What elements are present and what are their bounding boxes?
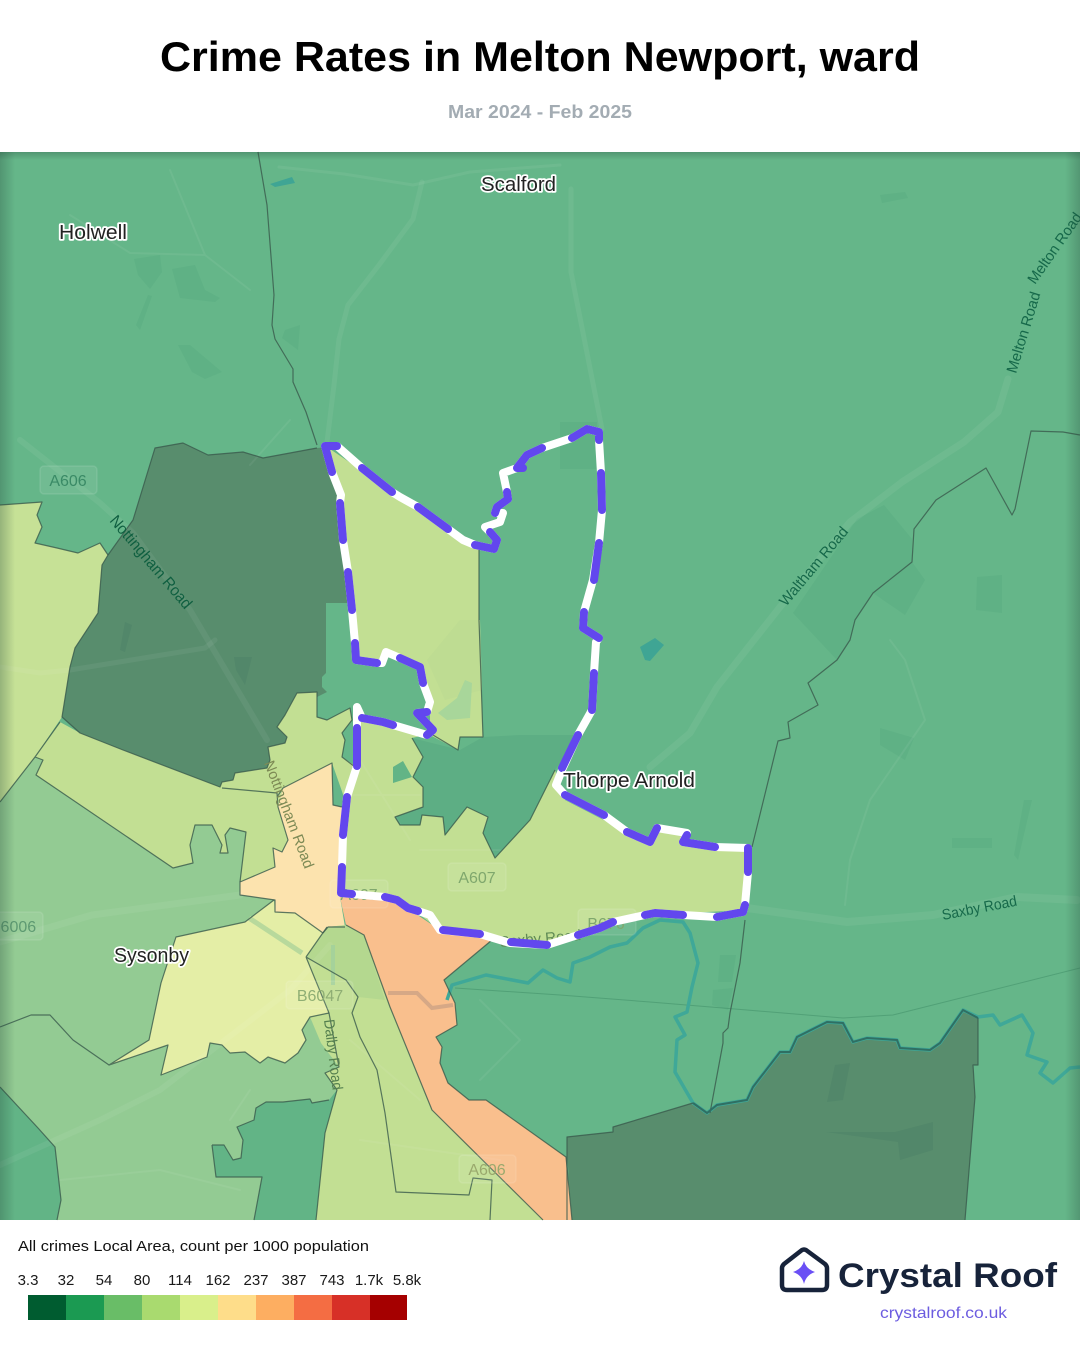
area: green pocket in centre xyxy=(393,761,412,783)
legend scale numbers: 54 xyxy=(96,1272,112,1289)
road shield: A607 west xyxy=(330,880,388,908)
road shield: A606 south xyxy=(459,1155,516,1183)
grey stream across orange zone xyxy=(388,993,453,1008)
legend scale numbers: 743 xyxy=(319,1272,345,1289)
road label: Melton Road south: Melton Road xyxy=(1004,290,1044,375)
legend scale numbers: 3.3 xyxy=(18,1272,38,1289)
area: west light green xyxy=(35,692,357,882)
area: ward north light green xyxy=(327,447,483,750)
area: centre-south light green xyxy=(306,925,543,1220)
roads xyxy=(0,165,1077,1190)
area: orange high-crime zone xyxy=(340,897,572,1220)
road shield: B6006 xyxy=(0,912,43,940)
wordmark: Crystal Roof xyxy=(838,1257,1058,1295)
area: centre-south wedge xyxy=(306,925,385,1000)
field patches xyxy=(134,192,1032,1010)
choropleth map xyxy=(0,152,1080,1220)
area: darker green band north of ward centre xyxy=(395,735,580,858)
road label: Nottingham Road south: Nottingham Road xyxy=(260,758,317,871)
place label: Sysonby: Sysonby xyxy=(114,945,189,967)
rivers xyxy=(447,920,1080,1113)
brand logo xyxy=(782,1250,1058,1322)
legend scale numbers: 114 xyxy=(168,1272,192,1289)
road label: Saxby Road east: Saxby Road xyxy=(941,893,1018,924)
website url: crystalroof.co.uk xyxy=(880,1305,1008,1322)
area: south-west mid green xyxy=(0,757,339,1220)
area: south green pocket xyxy=(212,1090,337,1220)
road shield: A606 north xyxy=(40,466,97,494)
place label: Scalford: Scalford xyxy=(481,174,556,196)
legend scale numbers: 162 xyxy=(205,1272,231,1289)
legend scale numbers: 32 xyxy=(58,1272,74,1289)
icon: house with sparkle xyxy=(782,1250,827,1290)
road label: Saxby Road hidden section: Saxby Road xyxy=(499,927,582,951)
legend colour swatches xyxy=(28,1295,407,1320)
place label: Thorpe Arnold: Thorpe Arnold xyxy=(563,770,695,792)
road shield: B676 xyxy=(578,909,636,935)
map edge vignette xyxy=(0,152,1080,1220)
legend scale numbers: 1.7k xyxy=(355,1272,384,1289)
place label: Holwell: Holwell xyxy=(59,222,127,244)
legend scale numbers: 387 xyxy=(281,1272,307,1289)
subtitle: date range: Mar 2024 - Feb 2025 xyxy=(448,102,632,122)
ponds xyxy=(270,177,664,661)
road shield: A606 north: A606 xyxy=(49,473,87,490)
legend scale numbers: 237 xyxy=(243,1272,269,1289)
title: Crime Rates in Melton Newport, ward xyxy=(160,33,920,80)
area: south-east dark low-crime zone xyxy=(567,1010,978,1220)
road shield: A607 east: A607 xyxy=(458,870,496,887)
road label: Dalby Road: Dalby Road xyxy=(320,1018,346,1091)
road shield: A606 south: A606 xyxy=(468,1162,506,1179)
road shield: B6047 xyxy=(286,981,353,1009)
legend scale numbers xyxy=(18,1272,422,1289)
legend xyxy=(18,1238,422,1320)
area: ward centre and east light green xyxy=(340,716,748,945)
area: Sysonby pale yellow zone xyxy=(109,900,329,1075)
legend scale numbers: 80 xyxy=(134,1272,150,1289)
road shield: A607 east xyxy=(448,863,506,891)
legend scale numbers: 5.8k xyxy=(393,1272,422,1289)
ward boundary dashed outline xyxy=(325,429,748,945)
ward north subtle tint xyxy=(427,620,482,700)
area: north-west dark low-crime zone xyxy=(62,443,352,787)
legend title: All crimes Local Area, count per 1000 population xyxy=(18,1238,369,1255)
boundary lines xyxy=(0,152,1080,1220)
railway line xyxy=(455,968,1080,1018)
road label: Nottingham Road north: Nottingham Road xyxy=(106,513,195,613)
road label: Waltham Road: Waltham Road xyxy=(776,524,852,610)
dark zone field patches xyxy=(120,622,933,1160)
area: park tint xyxy=(438,680,472,720)
road shield: A607 west: A607 xyxy=(340,887,378,904)
area: far-west light green xyxy=(0,502,108,802)
road shield: B6047: B6047 xyxy=(297,988,343,1005)
road shield: B676: B676 xyxy=(587,916,625,933)
area: south-west green pocket xyxy=(0,1087,61,1220)
area: cream mid-crime zone xyxy=(240,763,345,933)
